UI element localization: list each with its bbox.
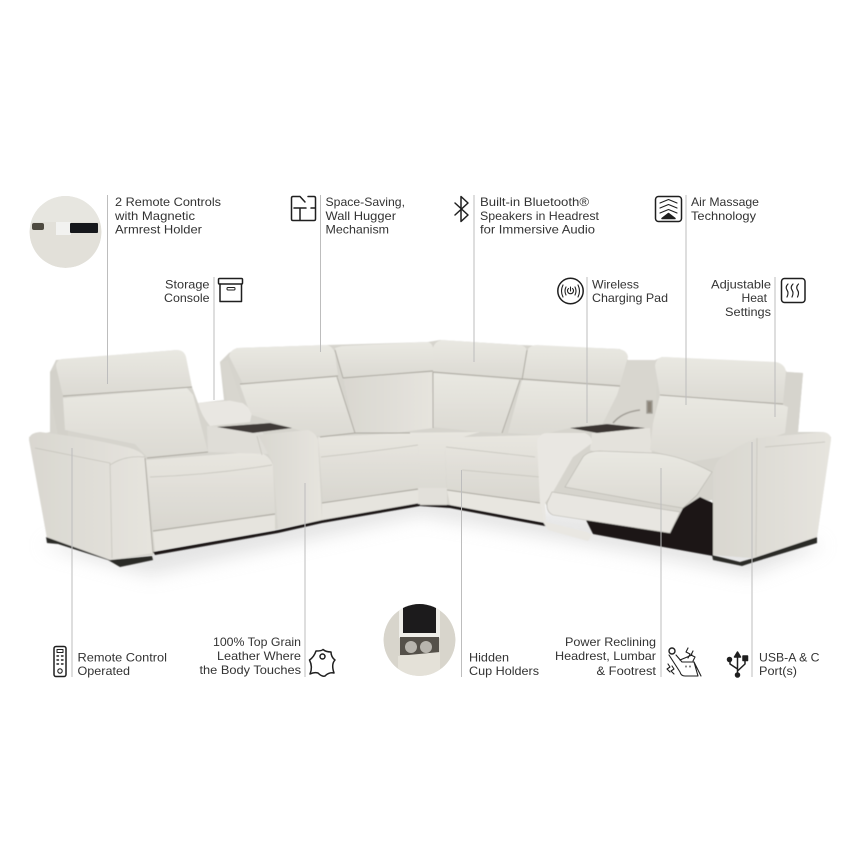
headrest four bbox=[433, 340, 527, 378]
callout: bluetooth bbox=[455, 195, 600, 236]
icon: usb bbox=[728, 652, 748, 677]
text: air massage: Technology bbox=[691, 209, 756, 223]
right seat bbox=[445, 435, 545, 503]
callout: usb ports bbox=[728, 651, 820, 678]
middle seat bbox=[318, 433, 420, 502]
callout: top grain leather bbox=[200, 635, 335, 677]
dark recess under sofa bbox=[153, 497, 713, 556]
left side strip bbox=[50, 369, 68, 436]
back cushion two bbox=[240, 377, 355, 436]
callout: remote control bbox=[54, 646, 167, 678]
sectional sofa photo bbox=[29, 340, 831, 567]
extended footrest bbox=[547, 492, 680, 533]
text: heat settings: Heat bbox=[742, 291, 768, 305]
text: storage console: Console bbox=[164, 291, 210, 305]
text: leather: 100% Top Grain bbox=[213, 635, 301, 649]
icon: floor plan bbox=[292, 196, 316, 220]
callout: wall hugger bbox=[292, 195, 405, 236]
headrest three bbox=[335, 342, 433, 377]
floor shadow bbox=[40, 495, 825, 575]
middle side strip bbox=[220, 360, 242, 403]
text: leather: Leather Where bbox=[217, 649, 301, 663]
callout: cup holders bbox=[384, 604, 539, 678]
text: wall hugger: Wall Hugger bbox=[326, 209, 396, 223]
right console arm bbox=[537, 433, 592, 541]
text: remote controls: with Magnetic bbox=[114, 209, 195, 223]
text: wireless charging: Charging Pad bbox=[592, 291, 668, 305]
text: storage console: Storage bbox=[165, 278, 210, 292]
callout: wireless charging bbox=[558, 278, 668, 305]
left tray bbox=[217, 423, 292, 433]
left recliner seat bbox=[146, 452, 275, 530]
left recliner headrest bbox=[56, 350, 192, 396]
icon: air massage bbox=[656, 196, 682, 222]
console body bbox=[207, 426, 268, 454]
icon: massage chair bbox=[667, 648, 701, 676]
console rear wall behind recliner bbox=[602, 360, 658, 450]
text: heat settings: Settings bbox=[725, 305, 771, 319]
reclined seat bbox=[565, 451, 712, 508]
icon: wireless charging bbox=[558, 278, 583, 304]
callout: remote holder bbox=[29, 195, 221, 268]
right recliner legs bbox=[712, 537, 817, 566]
back cushion four bbox=[433, 373, 520, 433]
callout: storage console bbox=[164, 278, 242, 305]
icon: leather hide bbox=[310, 650, 335, 676]
left recliner footrest bbox=[153, 515, 275, 551]
right recliner headrest bbox=[655, 357, 786, 403]
text: leather: the Body Touches bbox=[200, 663, 301, 677]
text: bluetooth: Built-in Bluetooth® bbox=[480, 195, 589, 209]
text: air massage: Air Massage bbox=[691, 195, 759, 209]
text: wall hugger: Mechanism bbox=[326, 222, 389, 236]
text: cup holders: Cup Holders bbox=[469, 664, 539, 678]
text: usb ports: Port(s) bbox=[759, 664, 797, 678]
text: cup holders: Hidden bbox=[469, 651, 509, 665]
cushion seams bbox=[63, 350, 783, 553]
text: power reclining: & Footrest bbox=[596, 664, 657, 678]
left recliner legs bbox=[46, 537, 153, 567]
icon: bluetooth bbox=[455, 196, 468, 222]
corner seat wedge bbox=[385, 432, 480, 505]
back cushion three bbox=[343, 372, 433, 434]
right charging cable and port bbox=[613, 401, 652, 423]
right console body bbox=[590, 428, 652, 455]
callout: air massage bbox=[656, 195, 759, 223]
photo circle: cup holders bbox=[384, 604, 456, 676]
middle footrest bbox=[322, 490, 418, 520]
text: usb ports: USB-A & C bbox=[759, 651, 820, 665]
right footrest bbox=[447, 490, 543, 522]
headrest two bbox=[229, 345, 338, 384]
text: bluetooth: Speakers in Headrest bbox=[480, 209, 600, 223]
left armrest bbox=[29, 432, 153, 560]
icon: remote bbox=[54, 646, 66, 676]
icon: heat waves bbox=[782, 278, 805, 302]
left recliner back cushion bbox=[63, 388, 208, 457]
callout: heat settings bbox=[711, 278, 805, 319]
right recliner back cushion bbox=[650, 395, 788, 462]
text: wireless charging: Wireless bbox=[592, 278, 639, 292]
callout: power reclining bbox=[555, 635, 701, 678]
front console bbox=[257, 430, 322, 529]
right side strip bbox=[785, 372, 803, 434]
sofa base silhouette bbox=[29, 340, 831, 560]
console armrest pad bbox=[198, 400, 252, 426]
text: heat settings: Adjustable bbox=[711, 278, 771, 292]
text: power reclining: Headrest, Lumbar bbox=[555, 649, 656, 663]
text: remote controls: Armrest Holder bbox=[115, 222, 202, 236]
headrest five bbox=[523, 345, 628, 385]
icon: box bbox=[218, 278, 242, 302]
text: remote control: Operated bbox=[78, 664, 130, 678]
right tray bbox=[570, 424, 645, 433]
back cushion five bbox=[508, 380, 620, 435]
text: wall hugger: Space-Saving, bbox=[326, 195, 405, 209]
text: bluetooth: for Immersive Audio bbox=[480, 222, 595, 236]
photo circle: armrest remote bbox=[29, 196, 102, 268]
leader lines bbox=[72, 195, 775, 677]
infographic canvas bbox=[28, 195, 832, 678]
text: power reclining: Power Reclining bbox=[565, 635, 656, 649]
right armrest bbox=[713, 432, 831, 558]
text: remote control: Remote Control bbox=[78, 651, 167, 665]
text: remote controls: 2 Remote Controls bbox=[115, 195, 221, 209]
